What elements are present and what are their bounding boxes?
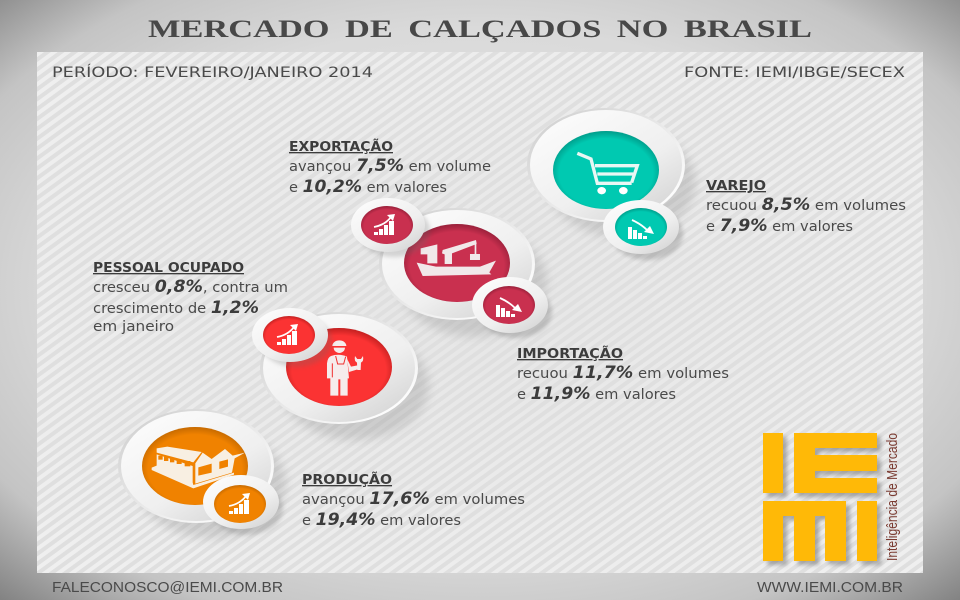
varejo text: VAREJO (706, 178, 766, 194)
exportacao text: avançou 7,5% em volume (289, 156, 491, 175)
icon: falling chart (628, 220, 654, 239)
exportacao text: EXPORTAÇÃO (289, 138, 393, 155)
importacao text: e 11,9% em valores (517, 384, 676, 403)
icon: factory (152, 447, 245, 488)
pessoal ocupado text: cresceu 0,8%, contra um (93, 277, 288, 296)
pessoal ocupado text (93, 260, 288, 335)
pessoal ocupado text: crescimento de 1,2% (93, 298, 259, 317)
varejo text: e 7,9% em valores (706, 216, 853, 235)
logo tagline: Inteligência de Mercado (884, 433, 901, 561)
producao text: PRODUÇÃO (302, 471, 392, 488)
varejo text (706, 178, 906, 235)
icon: shopping cart (577, 153, 637, 194)
producao text: e 19,4% em valores (302, 510, 461, 529)
exportacao group (351, 198, 552, 338)
title: MERCADO DE CALÇADOS NO BRASIL (148, 16, 812, 43)
IEMI logo (763, 433, 901, 565)
footer website: WWW.IEMI.COM.BR (757, 580, 903, 596)
importacao text: recuou 11,7% em volumes (517, 363, 729, 382)
varejo text: recuou 8,5% em volumes (706, 195, 906, 214)
period label: PERÍODO: FEVEREIRO/JANEIRO 2014 (52, 64, 373, 81)
pessoal ocupado text: em janeiro (93, 319, 174, 335)
icon: rising chart (277, 324, 298, 345)
producao group (118, 409, 286, 538)
icon: worker with wrench (327, 340, 363, 396)
varejo group (527, 108, 696, 260)
importacao text: IMPORTAÇÃO (517, 345, 623, 362)
source label: FONTE: IEMI/IBGE/SECEX (684, 65, 906, 81)
importacao text (517, 345, 729, 403)
icon: rising chart (229, 493, 250, 514)
producao text: avançou 17,6% em volumes (302, 489, 525, 508)
footer email: FALECONOSCO@IEMI.COM.BR (52, 580, 283, 596)
icon: rising chart (374, 214, 395, 235)
producao text (302, 471, 525, 529)
pessoal ocupado group (252, 308, 429, 440)
icon: falling chart (496, 298, 522, 317)
exportacao text (289, 138, 491, 196)
icon: cargo ship (417, 240, 496, 276)
pessoal ocupado text: PESSOAL OCUPADO (93, 260, 244, 276)
exportacao text: e 10,2% em valores (289, 177, 447, 196)
